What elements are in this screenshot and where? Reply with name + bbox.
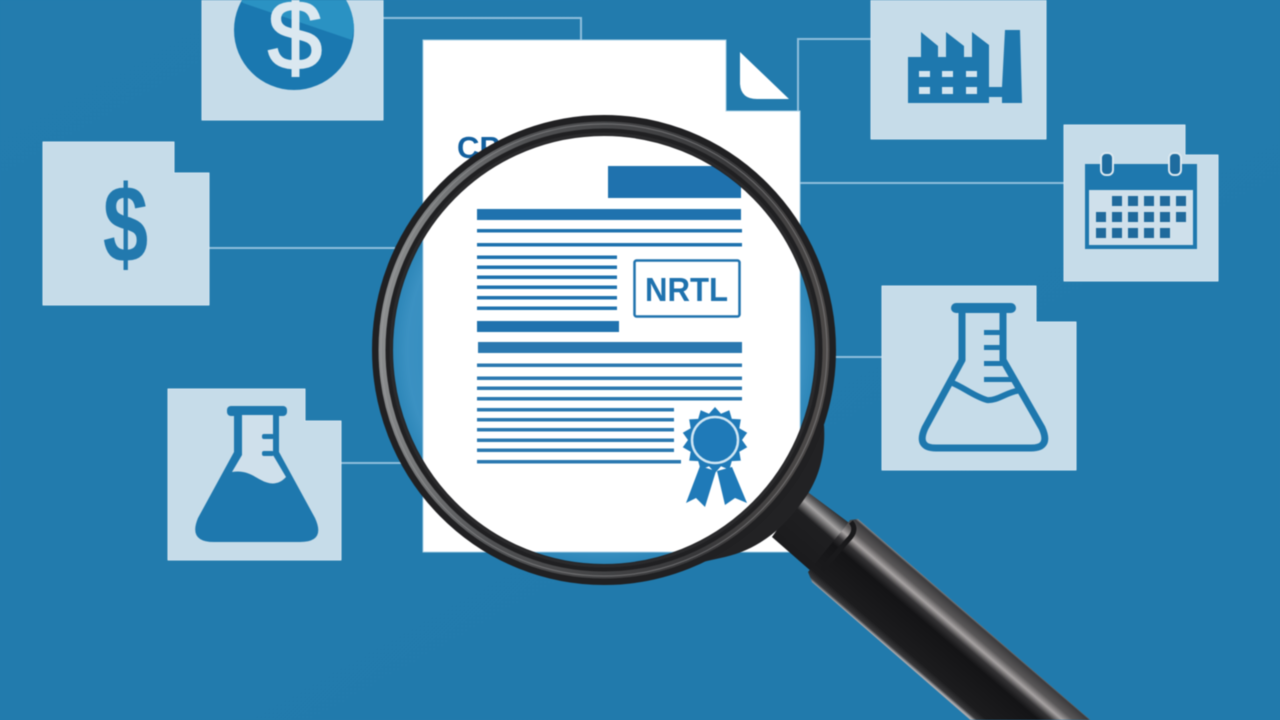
header block	[608, 166, 741, 198]
NRTL badge: NRTL	[645, 271, 728, 308]
icon: filled flask	[195, 406, 318, 542]
card: calendar	[1064, 125, 1218, 281]
card: outline flask	[882, 286, 1076, 470]
text lines: bottom	[477, 342, 742, 464]
icon: dollar sign: $	[103, 162, 148, 286]
NRTL badge	[634, 260, 740, 316]
lens collar	[698, 425, 824, 563]
lens tint	[390, 134, 818, 566]
card: factory	[871, 0, 1046, 139]
lens ring	[381, 124, 827, 576]
icon: calendar	[1085, 153, 1197, 249]
text lines: top	[477, 209, 742, 332]
document heading: CP	[457, 130, 500, 165]
card: dollar	[43, 142, 209, 305]
document	[423, 40, 800, 552]
card: dollar coin	[202, 0, 383, 120]
handle neck	[772, 490, 852, 572]
icon: folded corner	[740, 52, 789, 99]
magnifying glass	[381, 124, 1095, 720]
icon: outline flask	[922, 303, 1045, 448]
connector lines	[209, 18, 1064, 463]
icon: factory	[908, 30, 1022, 103]
card: filled flask	[168, 389, 341, 560]
icon: dollar coin	[230, 0, 360, 90]
icon: certificate seal	[683, 407, 747, 507]
handle grip	[808, 519, 1095, 720]
